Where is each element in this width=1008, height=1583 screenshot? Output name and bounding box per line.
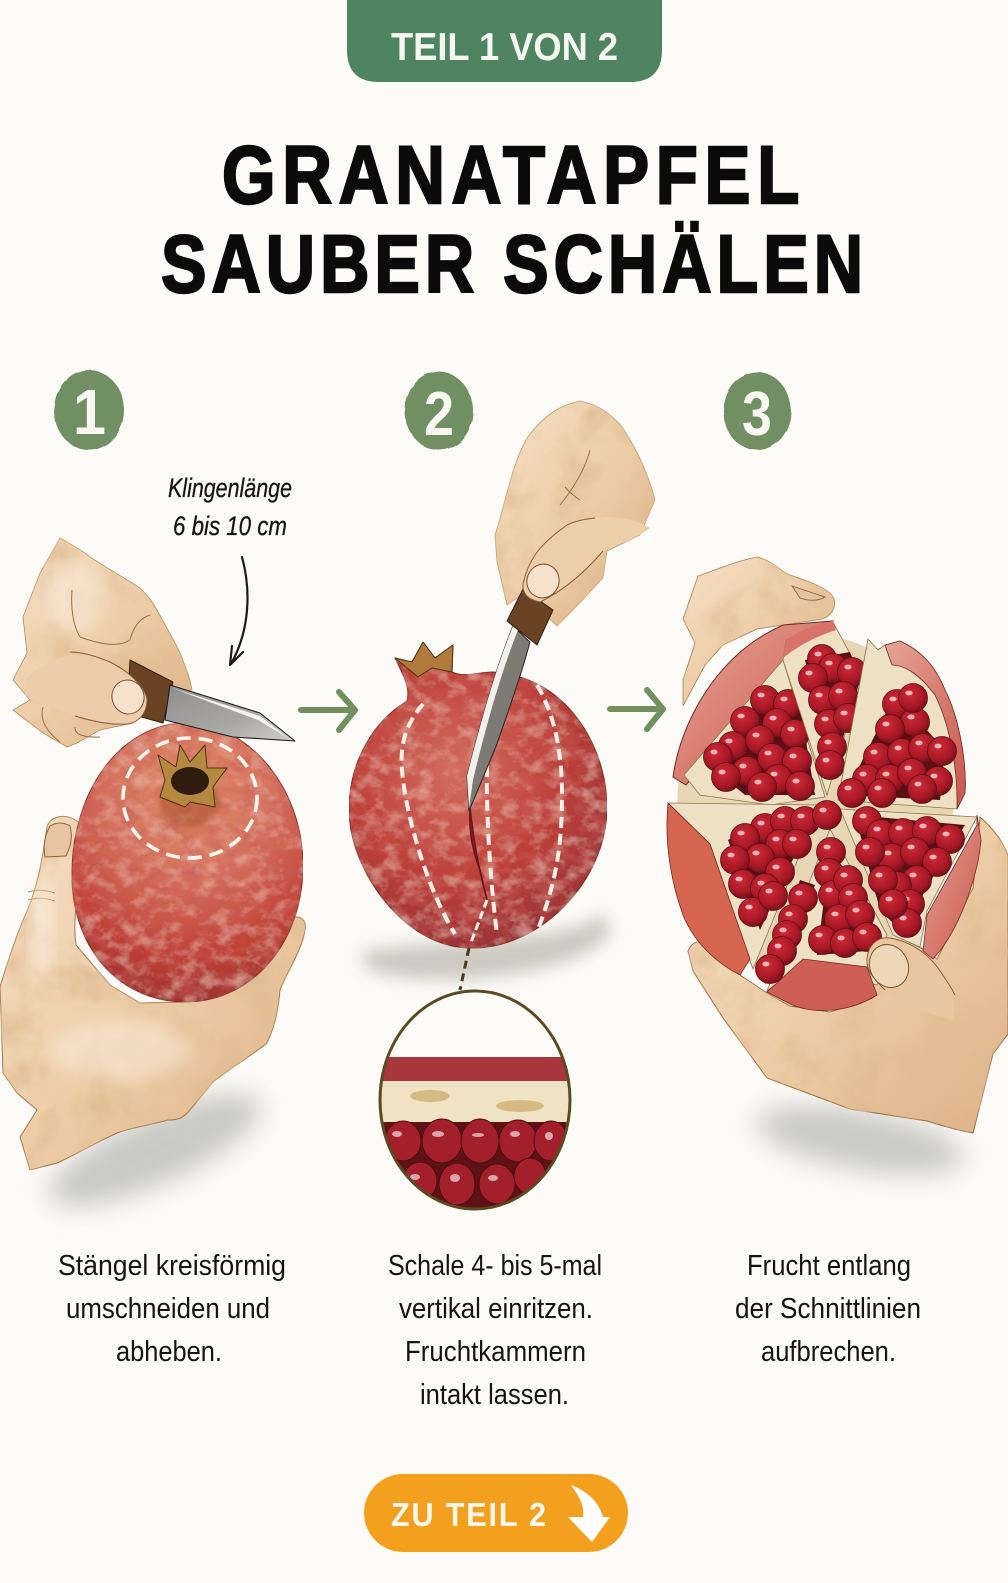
caption: step 1	[58, 1250, 286, 1368]
crown	[395, 642, 453, 677]
caption: step 1: Stängel kreisförmig	[58, 1250, 286, 1282]
shadow under hand	[751, 1092, 969, 1188]
icon: curved down arrow	[568, 1485, 610, 1542]
segment: lower left	[667, 803, 820, 975]
caption: step 1: umschneiden und	[66, 1293, 270, 1325]
thumb over knife	[25, 652, 148, 724]
caption: step 3	[735, 1250, 921, 1368]
ground shadow	[362, 915, 610, 980]
caption: step 3: der Schnittlinien	[735, 1293, 921, 1325]
crown	[158, 745, 227, 807]
caption: step 3: Frucht entlang	[747, 1250, 911, 1282]
step 1 badge: 1	[73, 376, 106, 448]
title: GRANATAPFEL	[222, 130, 806, 221]
lower hand	[688, 817, 1008, 1133]
cut line: dashed circle	[123, 738, 257, 858]
title	[161, 130, 868, 310]
step 2 badge	[405, 372, 473, 450]
segment: lower right	[840, 806, 981, 959]
arrow: step 1 to step 2	[301, 692, 355, 730]
caption: step 2	[388, 1250, 602, 1411]
caption: step 1: abheben.	[116, 1336, 222, 1368]
caption: step 3: aufbrechen.	[761, 1336, 896, 1368]
caption: step 2: Fruchtkammern	[405, 1336, 586, 1368]
step 2 badge: 2	[424, 380, 454, 449]
segment: top	[783, 621, 866, 795]
knife	[467, 589, 553, 811]
illustration: step 1	[0, 538, 305, 1228]
caption: step 2: intakt lassen.	[420, 1379, 569, 1411]
title: SAUBER SCHÄLEN	[161, 219, 868, 310]
upper hand	[13, 538, 192, 747]
dashed score lines	[402, 685, 562, 934]
connector to detail	[460, 900, 487, 990]
thumb	[522, 517, 650, 602]
paring knife	[127, 660, 295, 741]
arrow: annotation pointer	[230, 557, 247, 665]
step 3 badge: 3	[742, 380, 772, 449]
fruit backing	[677, 635, 953, 985]
annotation: blade length	[168, 473, 292, 665]
pomegranate	[349, 642, 607, 948]
caption: step 2: Schale 4- bis 5-mal	[388, 1250, 602, 1282]
illustration: step 3	[667, 557, 1008, 1188]
lower hand	[0, 816, 305, 1170]
segment: upper left	[673, 621, 833, 805]
hand	[495, 401, 655, 626]
illustration: step 2	[349, 401, 655, 990]
knife cut	[470, 808, 487, 900]
thumb	[862, 938, 955, 1020]
caption: step 2: vertikal einritzen.	[399, 1293, 593, 1325]
button: Zu Teil 2: ZU TEIL 2	[391, 1496, 548, 1533]
header tab: Teil 1 von 2	[347, 0, 662, 82]
stem collar	[160, 776, 220, 828]
annotation: blade length: Klingenlänge	[168, 473, 292, 503]
upper hand	[683, 557, 835, 706]
step 3 badge	[723, 372, 791, 450]
header tab: Teil 1 von 2: TEIL 1 VON 2	[391, 26, 618, 69]
pomegranate	[72, 723, 303, 1002]
button: Zu Teil 2	[364, 1474, 628, 1552]
segment: bottom	[756, 829, 887, 1010]
arrow: step 2 to step 3	[610, 690, 663, 729]
detail inset: fruit cross-section	[375, 991, 575, 1212]
annotation: blade length: 6 bis 10 cm	[173, 511, 287, 541]
shadow under hand	[36, 1072, 274, 1228]
segment: upper right	[838, 639, 965, 809]
step 1 badge	[54, 370, 124, 450]
centre arils	[812, 800, 842, 830]
